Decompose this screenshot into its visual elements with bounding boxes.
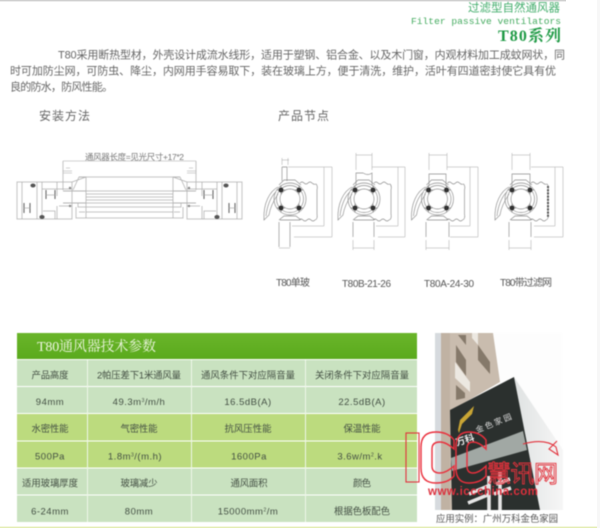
heading: installation: 安装方法 [39,108,90,123]
photo caption: 应用实例：广州万科金色家园 [436,513,558,524]
row: glass thickness etc: 80mm [125,506,153,518]
row: water tightness etc: /(m.h) [134,452,162,462]
row: product height etc: 产品高度 [32,370,68,380]
right gutter [597,0,600,528]
row: product height etc: 3 [142,398,145,404]
node: T80A-24-30 [411,153,478,290]
row: glass thickness etc: 2 [263,508,267,514]
rows: green backgrounds [17,360,417,522]
node: T80 with filter net: T80带过滤网 [500,276,552,289]
sign text: 金色家园 [474,411,513,435]
row: product height etc [32,370,409,408]
row: water tightness etc: 抗风压性能 [224,423,272,434]
title block [411,0,561,45]
intro paragraph [10,48,565,94]
row: water tightness etc: 水密性能 [32,423,69,434]
row: product height etc: 49.3m [113,397,142,408]
row: product height etc: 22.5dB(A) [338,397,386,408]
watermark letter I [406,433,419,482]
row: glass thickness etc: 通风面积 [230,478,268,488]
watermark letters CC [421,432,486,483]
watermark [406,432,558,498]
row: product height etc: /m/h [145,397,165,408]
row: product height etc: 2帕压差下1米通风量 [97,370,181,380]
table header: T80通风器技术参数 [37,338,156,355]
top rule [0,0,566,1]
installation drawing [17,152,242,219]
row: water tightness etc: 3 [131,452,134,458]
row: water tightness etc: 气密性能 [120,423,158,434]
bottom rule [0,527,597,528]
watermark arc [523,441,558,455]
row: water tightness etc: 1600Pa [231,452,267,462]
watermark name: 慧讯网 [487,461,558,488]
title: Chinese: 过滤型自然通风器 [468,0,560,14]
row: water tightness etc: 3.6w/m [337,452,371,462]
logo stripes [458,406,474,433]
row: glass thickness etc: 玻璃减少 [120,478,158,488]
row: glass thickness etc: 15000mm [218,506,263,518]
node: T80 single glass [264,158,332,289]
row: glass thickness etc [22,478,391,518]
row: glass thickness etc: 颜色 [353,478,372,488]
row: water tightness etc: 保温性能 [344,423,381,434]
node: T80B-21-26: T80B-21-26 [342,279,391,290]
intro paragraph: 良的防水，防风性能。 [10,80,113,94]
heading: product nodes: 产品节点 [278,109,329,123]
dimension label: 通风器长度=见光尺寸+17*2 [85,152,184,162]
sign glass side [514,377,563,510]
row: product height etc: 16.5dB(A) [224,397,272,408]
photo: application example [435,333,563,510]
intro paragraph: 时可加防尘网，可防虫、降尘，内网用手容易取下，装在玻璃上方，便于清洗，维护，活叶有四道密封使它具有优 [10,64,556,78]
title: series: T80系列 [498,26,561,45]
row: product height etc: 通风条件下对应隔音量 [201,370,295,380]
building [435,333,500,510]
row: glass thickness etc: 根据色板配色 [334,506,391,516]
sign large white glyph [468,472,511,510]
watermark url: www.iccchina.com [427,486,538,498]
specification table [17,333,417,522]
row: glass thickness etc: 6-24mm [31,506,69,518]
node: T80A-24-30: T80A-24-30 [424,279,474,290]
row: glass thickness etc: 适用玻璃厚度 [22,478,78,488]
row: water tightness etc: .k [374,452,383,462]
table header [17,333,417,359]
row: water tightness etc: 1.8m [108,452,131,462]
title: English: Filter passive ventilators [411,16,561,27]
row: product height etc: 94mm [36,397,64,408]
row: water tightness etc [32,423,383,462]
photo: application example: 万科 [454,431,476,449]
row: product height etc: 关闭条件下对应隔音量 [315,370,409,380]
node: T80 single glass: T80单玻 [276,276,310,289]
node: T80B-21-26 [338,153,405,290]
sign block [450,377,540,510]
intro paragraph: T80采用断热型材，外壳设计成流水线形，适用于塑钢、铝合金、以及木门窗，内观材料加工成蚊网状，同 [58,48,565,62]
row: water tightness etc: 500Pa [35,452,65,462]
node: T80 with filter net [495,153,563,289]
row: water tightness etc: 2 [371,452,374,458]
row: glass thickness etc: /m [267,506,278,518]
